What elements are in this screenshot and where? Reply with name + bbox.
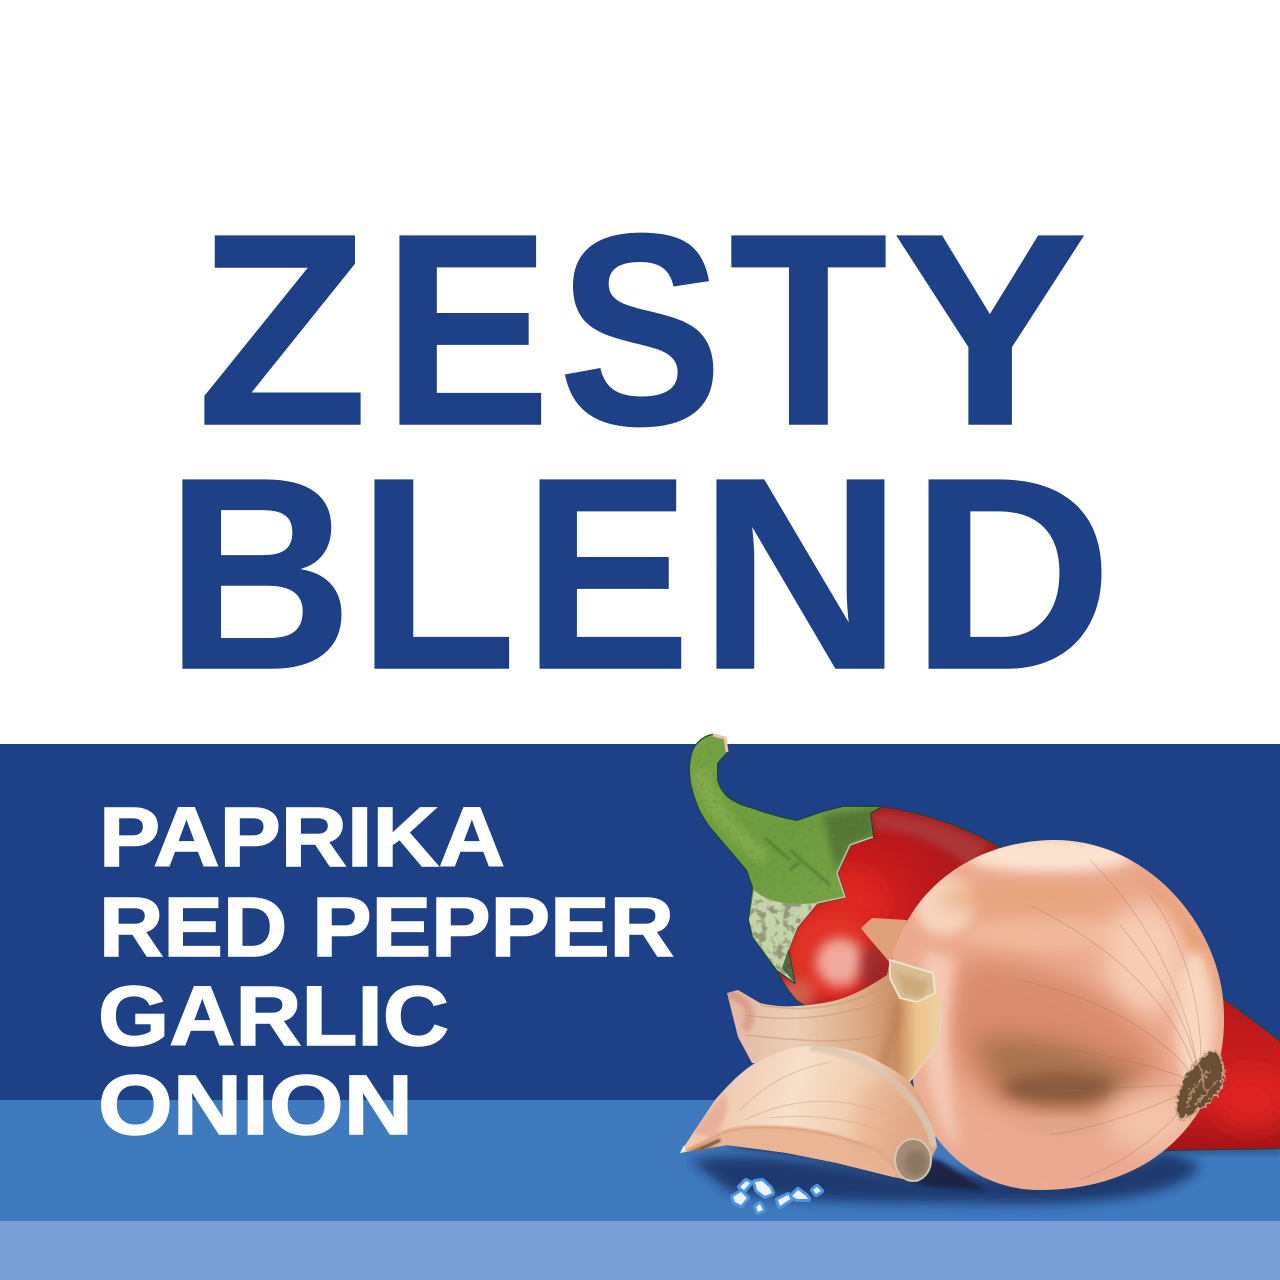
onion: [861, 837, 1226, 1190]
garlic crown: [890, 960, 935, 1002]
title: ZESTY BLEND: E: [383, 178, 550, 482]
ingredient list: PAPRIKA: [99, 790, 505, 884]
garlic clove: back: [727, 960, 942, 1082]
title: ZESTY BLEND: S: [559, 177, 722, 482]
garlic clove: front: [680, 1046, 937, 1182]
title: ZESTY BLEND: B: [166, 422, 353, 727]
onion root: [1176, 1050, 1223, 1120]
garlic base: [895, 1139, 931, 1181]
title: ZESTY BLEND: E: [524, 422, 690, 726]
ingredient list: [98, 790, 674, 1152]
pepper stem and calyx: [685, 730, 885, 990]
onion skin flap: [861, 918, 907, 963]
title: ZESTY BLEND: N: [698, 421, 903, 726]
title: ZESTY BLEND: D: [911, 421, 1112, 726]
ingredient list: GARLIC: [98, 969, 449, 1063]
ground shadow: [690, 1142, 1280, 1204]
background bands: [0, 744, 1280, 1280]
red pepper body: [770, 800, 1280, 1160]
ingredient list: ONION: [98, 1058, 413, 1152]
ingredient list: RED PEPPER: [99, 880, 674, 974]
title: ZESTY BLEND: Z: [197, 177, 368, 482]
salt flakes: [733, 1181, 821, 1212]
title: ZESTY BLEND: T: [729, 178, 888, 482]
illustration: pepper, onion, garlic and salt: [680, 730, 1280, 1212]
garlic tip highlight: [680, 1145, 686, 1153]
title: ZESTY BLEND: L: [358, 422, 516, 726]
title: ZESTY BLEND: [166, 177, 1112, 727]
title: ZESTY BLEND: Y: [893, 177, 1087, 482]
